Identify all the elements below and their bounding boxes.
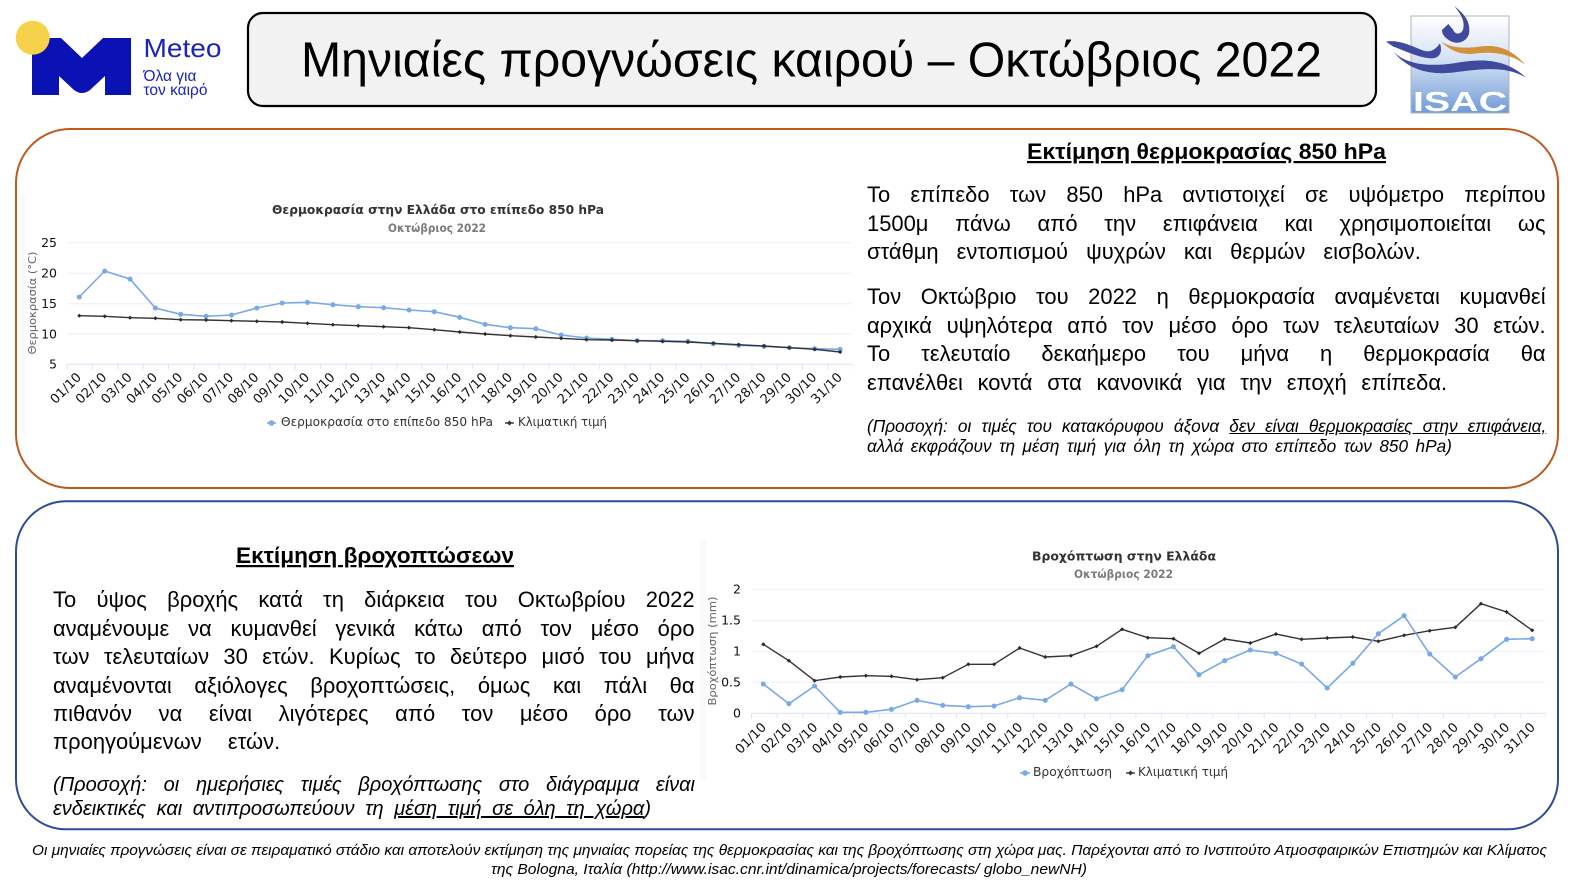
logo: Meteo [16, 21, 222, 99]
x axis labels: 22/10 [1271, 720, 1308, 757]
chart title: Βροχόπτωση στην Ελλάδα [1032, 548, 1216, 564]
text block: temperature explanation [867, 182, 1546, 456]
x axis labels: 13/10 [1040, 720, 1077, 757]
x axis labels: 01/10 [48, 370, 85, 407]
text block: precipitation explanation: ενδεικτικές και αντιπροσωπεύουν τη μέση τιμή σε όλη τη χώρα) [53, 798, 651, 820]
line chart: precipitation [700, 540, 1546, 780]
x axis labels: 06/10 [861, 720, 898, 757]
text block: precipitation explanation: Το ύψος βροχής κατά τη διάρκεια του Οκτωβρίου 2022 [53, 586, 695, 612]
x axis labels: 07/10 [200, 370, 237, 407]
x axis labels: 04/10 [810, 720, 847, 757]
logo wordmark: ISAC [1413, 86, 1507, 117]
x axis labels: 09/10 [938, 720, 975, 757]
heading: precipitation: Εκτίμηση βροχοπτώσεων [236, 543, 514, 568]
x axis labels: 25/10 [1348, 720, 1385, 757]
x axis labels: 05/10 [835, 720, 872, 757]
text block: precipitation explanation: (Προσοχή: οι ημερήσιες τιμές βροχόπτωσης στο διάγραμμα είναι [53, 774, 695, 796]
x axis labels: 27/10 [707, 370, 744, 407]
y axis labels [721, 582, 741, 720]
x axis labels: 03/10 [784, 720, 821, 757]
series: climate value [79, 316, 840, 352]
y axis labels: 25 [41, 235, 57, 250]
logo: ISAC [1386, 6, 1526, 117]
x axis labels: 19/10 [1194, 720, 1231, 757]
y axis labels: 20 [41, 266, 57, 280]
x axis labels: 31/10 [1502, 720, 1539, 757]
x axis labels [733, 720, 1539, 757]
panel: temperature [16, 129, 1558, 488]
chart legend: Θερμοκρασία στο επίπεδο 850 hPa [281, 415, 493, 429]
x axis labels: 13/10 [352, 370, 389, 407]
x axis labels: 04/10 [124, 370, 161, 407]
x axis labels: 18/10 [1168, 720, 1206, 757]
text block: temperature explanation: (Προσοχή: οι τιμές του κατακόρυφου άξονα δεν είναι θερμοκρασίες στην επιφάνεια, [867, 416, 1546, 436]
x axis labels: 24/10 [1322, 720, 1359, 757]
x axis labels: 29/10 [758, 370, 795, 407]
text block: temperature explanation: στάθμη εντοπισμού ψυχρών και θερμών εισβολών. [867, 239, 1421, 264]
x axis labels: 22/10 [580, 370, 617, 407]
x axis labels: 05/10 [149, 370, 186, 407]
x axis labels: 25/10 [656, 370, 693, 407]
x axis labels: 29/10 [1450, 720, 1488, 757]
x axis labels: 23/10 [606, 370, 643, 407]
x axis labels: 28/10 [1425, 720, 1462, 757]
chart subtitle: Οκτώβριος 2022 [1074, 567, 1173, 581]
text block: precipitation explanation: αναμένονται αξιόλογες βροχοπτώσεις, όμως και πάλι θα [53, 672, 695, 698]
x axis labels: 09/10 [251, 370, 288, 407]
x axis labels: 02/10 [758, 720, 795, 757]
x axis labels: 24/10 [631, 370, 668, 407]
text block: temperature explanation: Το επίπεδο των 850 hPa αντιστοιχεί σε υψόμετρο περίπου [867, 182, 1546, 207]
y axis labels: 0.5 [721, 674, 741, 690]
y axis labels: 10 [41, 326, 57, 342]
x axis labels [48, 370, 846, 407]
x axis labels: 14/10 [1066, 720, 1103, 757]
x axis labels: 20/10 [530, 370, 567, 407]
x axis labels: 26/10 [682, 370, 719, 407]
y axis title: Θερμοκρασία (°C) [26, 252, 39, 354]
x axis labels: 11/10 [301, 370, 338, 407]
x axis labels: 15/10 [1092, 720, 1129, 757]
line chart: temperature 850 hPa [20, 195, 853, 435]
y axis labels: 1 [733, 644, 741, 658]
chart legend: Βροχόπτωση [1033, 765, 1112, 779]
footer note [32, 843, 1548, 878]
x axis labels: 28/10 [732, 370, 770, 407]
panel: precipitation [16, 501, 1558, 829]
text block: temperature explanation: 1500μ πάνω από την επιφάνεια και χρησιμοποιείται ως [867, 211, 1546, 236]
series: climate value [763, 604, 1532, 681]
x axis labels: 10/10 [963, 720, 1001, 757]
x axis labels: 30/10 [1476, 720, 1513, 757]
tagline: τον καιρό [144, 82, 207, 99]
x axis labels: 26/10 [1374, 720, 1411, 757]
x axis labels: 06/10 [175, 370, 212, 407]
text block: precipitation explanation: αναμένουμε να κυμανθεί γενικά κάτω από τον μέσο όρο [53, 616, 695, 640]
chart legend [267, 415, 607, 429]
text block: precipitation explanation: των τελευταίων 30 ετών. Κυρίως το δεύτερο μισό του μήνα [53, 644, 695, 668]
series: precipitation [763, 616, 1532, 712]
text block: temperature explanation: Το τελευταίο δεκαήμερο του μήνα η θερμοκρασία θα [867, 341, 1546, 366]
x axis labels: 02/10 [73, 370, 110, 407]
x axis labels: 01/10 [733, 720, 770, 757]
x axis labels: 11/10 [989, 720, 1026, 757]
y axis title: Βροχόπτωση (mm) [706, 597, 719, 705]
text block: precipitation explanation: πιθανόν να είναι λιγότερες από τον μέσο όρο των [53, 700, 695, 726]
x axis labels: 27/10 [1399, 720, 1436, 757]
x axis labels: 15/10 [403, 370, 440, 407]
brand name: Meteo [144, 33, 222, 63]
x axis labels: 08/10 [225, 370, 262, 407]
x axis labels: 21/10 [1245, 720, 1282, 757]
text block: precipitation explanation: προηγούμενων ετών. [53, 728, 280, 754]
title box [248, 13, 1376, 106]
x axis labels: 23/10 [1297, 720, 1334, 757]
x axis labels: 21/10 [555, 370, 592, 407]
chart legend [1020, 765, 1228, 779]
x axis labels: 19/10 [504, 370, 541, 407]
x axis labels: 07/10 [887, 720, 924, 757]
text block: temperature explanation: Τον Οκτώβριο του 2022 η θερμοκρασία αναμένεται κυμανθεί [867, 284, 1546, 309]
x axis labels: 16/10 [428, 370, 465, 407]
x axis labels: 18/10 [479, 370, 516, 407]
chart title: Θερμοκρασία στην Ελλάδα στο επίπεδο 850 hPa [272, 202, 604, 217]
x axis labels: 30/10 [783, 370, 820, 407]
y axis labels: 5 [49, 356, 57, 372]
y axis labels: 15 [41, 296, 57, 311]
x axis labels: 17/10 [454, 370, 491, 407]
icon: blue M [32, 38, 131, 95]
x axis labels: 10/10 [276, 370, 313, 407]
logo square [1411, 16, 1509, 113]
chart legend: Κλιματική τιμή [1138, 765, 1228, 779]
chart legend: Κλιματική τιμή [518, 415, 607, 429]
text block: temperature explanation: επανέλθει κοντά στα κανονικά για την εποχή επίπεδα. [867, 370, 1447, 395]
heading: temperature: Εκτίμηση θερμοκρασίας 850 hPa [1027, 139, 1387, 164]
tagline: Όλα για [142, 68, 196, 85]
x axis labels: 16/10 [1117, 720, 1154, 757]
y axis labels: 0 [733, 706, 741, 720]
y axis labels [41, 235, 57, 372]
series: temperature [79, 271, 840, 349]
y axis labels: 2 [733, 582, 741, 596]
text block: temperature explanation: αλλά εκφράζουν τη μέση τιμή για όλη τη χώρα στο επίπεδο των 850 hPa) [867, 436, 1452, 456]
x axis labels: 31/10 [809, 370, 846, 407]
x axis labels: 17/10 [1143, 720, 1180, 757]
x axis labels: 03/10 [98, 370, 136, 407]
icon: yellow sun [16, 21, 50, 55]
x axis labels: 12/10 [1015, 720, 1052, 757]
y axis labels: 1.5 [721, 612, 741, 628]
footer note: της Bologna, Ιταλία (http://www.isac.cnr.int/dinamica/projects/forecasts/ globo_newNH) [491, 862, 1087, 878]
x axis labels: 14/10 [377, 370, 415, 407]
text block: temperature explanation: αρχικά υψηλότερα από τον μέσο όρο των τελευταίων 30 ετών. [867, 313, 1546, 338]
text block: precipitation explanation [53, 586, 695, 820]
logo swooshes [1386, 6, 1526, 77]
x axis labels: 20/10 [1220, 720, 1257, 757]
x axis labels: 08/10 [912, 720, 949, 757]
title: Μηνιαίες προγνώσεις καιρού – Οκτώβριος 2022 [301, 34, 1322, 88]
footer note: Οι μηνιαίες προγνώσεις είναι σε πειραματικό στάδιο και αποτελούν εκτίμηση της μηνιαίας πορείας της θερμοκρασίας και της βροχόπτωσης στη χώρα μας. Παρέχονται από το Ινστιτούτο Ατμοσφαιρικών Επιστημών και Κλίματος [32, 843, 1548, 859]
x axis labels: 12/10 [327, 370, 364, 407]
chart subtitle: Οκτώβριος 2022 [388, 221, 486, 235]
